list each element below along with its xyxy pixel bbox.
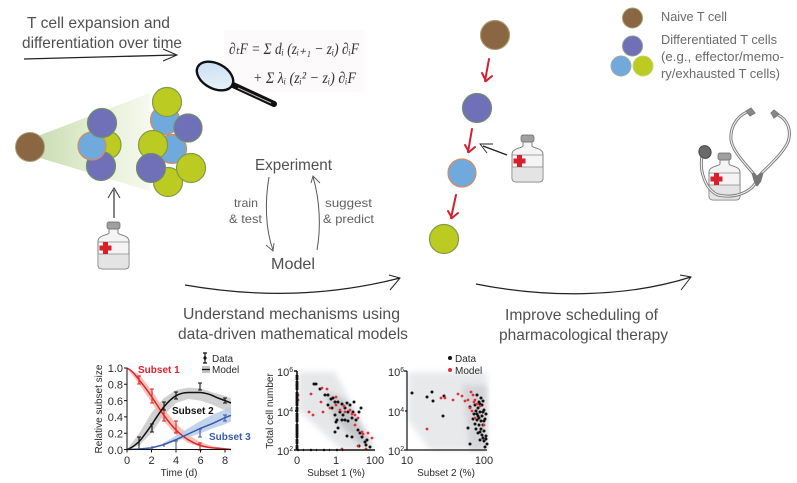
scatter chart: subset 2: 10	[401, 455, 413, 467]
scatter chart: subset 1: Subset 1 (%)	[307, 468, 365, 479]
legend: cell types: Differentiated T cells	[661, 32, 777, 47]
heading: understand mechanisms: Understand mechanisms using	[183, 306, 400, 323]
equation panel: ∂ₜF = Σ dᵢ (zᵢ₊₁ − zᵢ) ∂ᵢF	[229, 41, 359, 58]
scatter chart: subset 1	[265, 367, 384, 479]
cycle label: Model: Model	[271, 256, 315, 273]
equation panel: + Σ λᵢ (zᵢ² − zᵢ) ∂ᵢF	[253, 70, 356, 87]
title: T cell expansion	[22, 15, 182, 52]
heading: improve scheduling	[499, 307, 668, 344]
line chart: relative subset size: 0.2	[108, 428, 123, 440]
line chart: relative subset size: 0	[124, 455, 130, 467]
line chart: relative subset size: Relative subset size	[94, 364, 105, 453]
icon: stethoscope	[697, 108, 789, 196]
line chart: relative subset size: 1.0	[108, 363, 123, 375]
arrow: model to experiment	[311, 176, 320, 250]
legend: scatter	[448, 354, 482, 377]
arrow: therapy scheduling	[476, 275, 691, 294]
line chart: relative subset size: 0.6	[108, 396, 123, 408]
scatter chart: subset 2	[388, 367, 493, 479]
icon: drug bottle left	[98, 222, 129, 269]
line chart: relative subset size: 6	[197, 455, 204, 467]
heading: improve scheduling: pharmacological therapy	[499, 327, 668, 344]
line chart: relative subset size: Subset 1	[138, 365, 180, 376]
line chart: relative subset size: Subset 2	[172, 406, 214, 417]
arrow: over time	[24, 49, 177, 61]
scatter chart: subset 2: Subset 2 (%)	[417, 468, 475, 479]
cycle label: suggest and predict	[323, 196, 375, 226]
red arrows between cells	[448, 59, 492, 218]
scatter chart: subset 1: 100	[366, 455, 384, 467]
scatter chart: subset 1: 1	[333, 455, 339, 467]
arrow: experiment to model	[266, 177, 274, 251]
scatter chart: subset 2: 6	[400, 367, 404, 374]
legend: line chart: Model	[212, 365, 239, 376]
scatter chart: subset 1: Total cell number	[265, 373, 276, 449]
line chart: relative subset size	[94, 363, 251, 479]
scatter chart: subset 1: 0	[294, 455, 300, 467]
title: T cell expansion: differentiation over time	[22, 35, 182, 52]
scatter chart: subset 2: 10	[388, 446, 400, 458]
line chart: relative subset size: 0.4	[108, 412, 123, 424]
icon: drug bottle middle	[512, 135, 543, 182]
cycle label: train and test	[229, 196, 263, 226]
line chart: relative subset size: 2	[148, 455, 155, 467]
therapy sequence cells	[430, 20, 510, 254]
heading: understand mechanisms: data-driven mathematical models	[178, 326, 408, 343]
cycle label: suggest and predict: & predict	[323, 212, 375, 226]
line chart: relative subset size: 4	[173, 455, 179, 467]
arrow: bottle to differentiation	[480, 144, 507, 155]
line chart: relative subset size: 0.0	[108, 445, 123, 457]
legend: scatter: Model	[455, 366, 482, 377]
legend: line chart	[202, 353, 239, 376]
scatter chart: subset 2: 2	[400, 446, 404, 453]
legend: line chart: Data	[212, 354, 234, 365]
scatter chart: subset 2: 4	[400, 407, 404, 414]
cycle label: train and test: & test	[229, 212, 263, 226]
line chart: relative subset size: 0.8	[108, 380, 123, 392]
legend: cell types	[611, 8, 784, 81]
equation panel	[224, 30, 364, 92]
scatter chart: subset 2: 10	[388, 367, 400, 379]
scatter chart: subset 1: 4	[289, 407, 293, 414]
legend: scatter: Data	[455, 354, 477, 365]
arrow: drug to cells	[108, 188, 120, 218]
title: T cell expansion: T cell expansion and	[27, 15, 170, 32]
cycle label: suggest and predict: suggest	[325, 196, 373, 210]
scatter chart: subset 1: 2	[289, 446, 293, 453]
heading: improve scheduling: Improve scheduling of	[505, 307, 659, 324]
line chart: relative subset size: Time (d)	[161, 468, 197, 479]
legend: cell types: Naive T cell	[661, 9, 727, 24]
arrow: mechanisms to therapy	[185, 275, 400, 293]
heading: understand mechanisms	[178, 306, 408, 343]
legend: cell types: (e.g., effector/memo-	[661, 49, 784, 64]
cell cluster: late	[136, 88, 206, 196]
error bars: data	[137, 376, 227, 450]
cycle label: Experiment: Experiment	[255, 157, 333, 174]
scatter chart: subset 1: 10	[277, 407, 289, 419]
scatter chart: subset 1: 10	[277, 446, 289, 458]
scatter chart: subset 1: 6	[289, 367, 293, 374]
scatter chart: subset 2: 100	[475, 455, 493, 467]
naive T cell	[16, 132, 44, 162]
icon: magnifying glass	[192, 56, 274, 104]
line chart: relative subset size: 8	[222, 455, 228, 467]
cell cluster: early	[78, 108, 121, 180]
line chart: relative subset size: Subset 3	[209, 432, 251, 443]
cycle label: train and test: train	[234, 196, 258, 210]
icon: drug bottle right	[709, 153, 740, 200]
scatter chart: subset 1: 10	[277, 367, 289, 379]
legend: cell types: ry/exhausted T cells)	[661, 66, 780, 81]
green expansion cone	[30, 93, 150, 191]
scatter chart: subset 2: 10	[388, 407, 400, 419]
